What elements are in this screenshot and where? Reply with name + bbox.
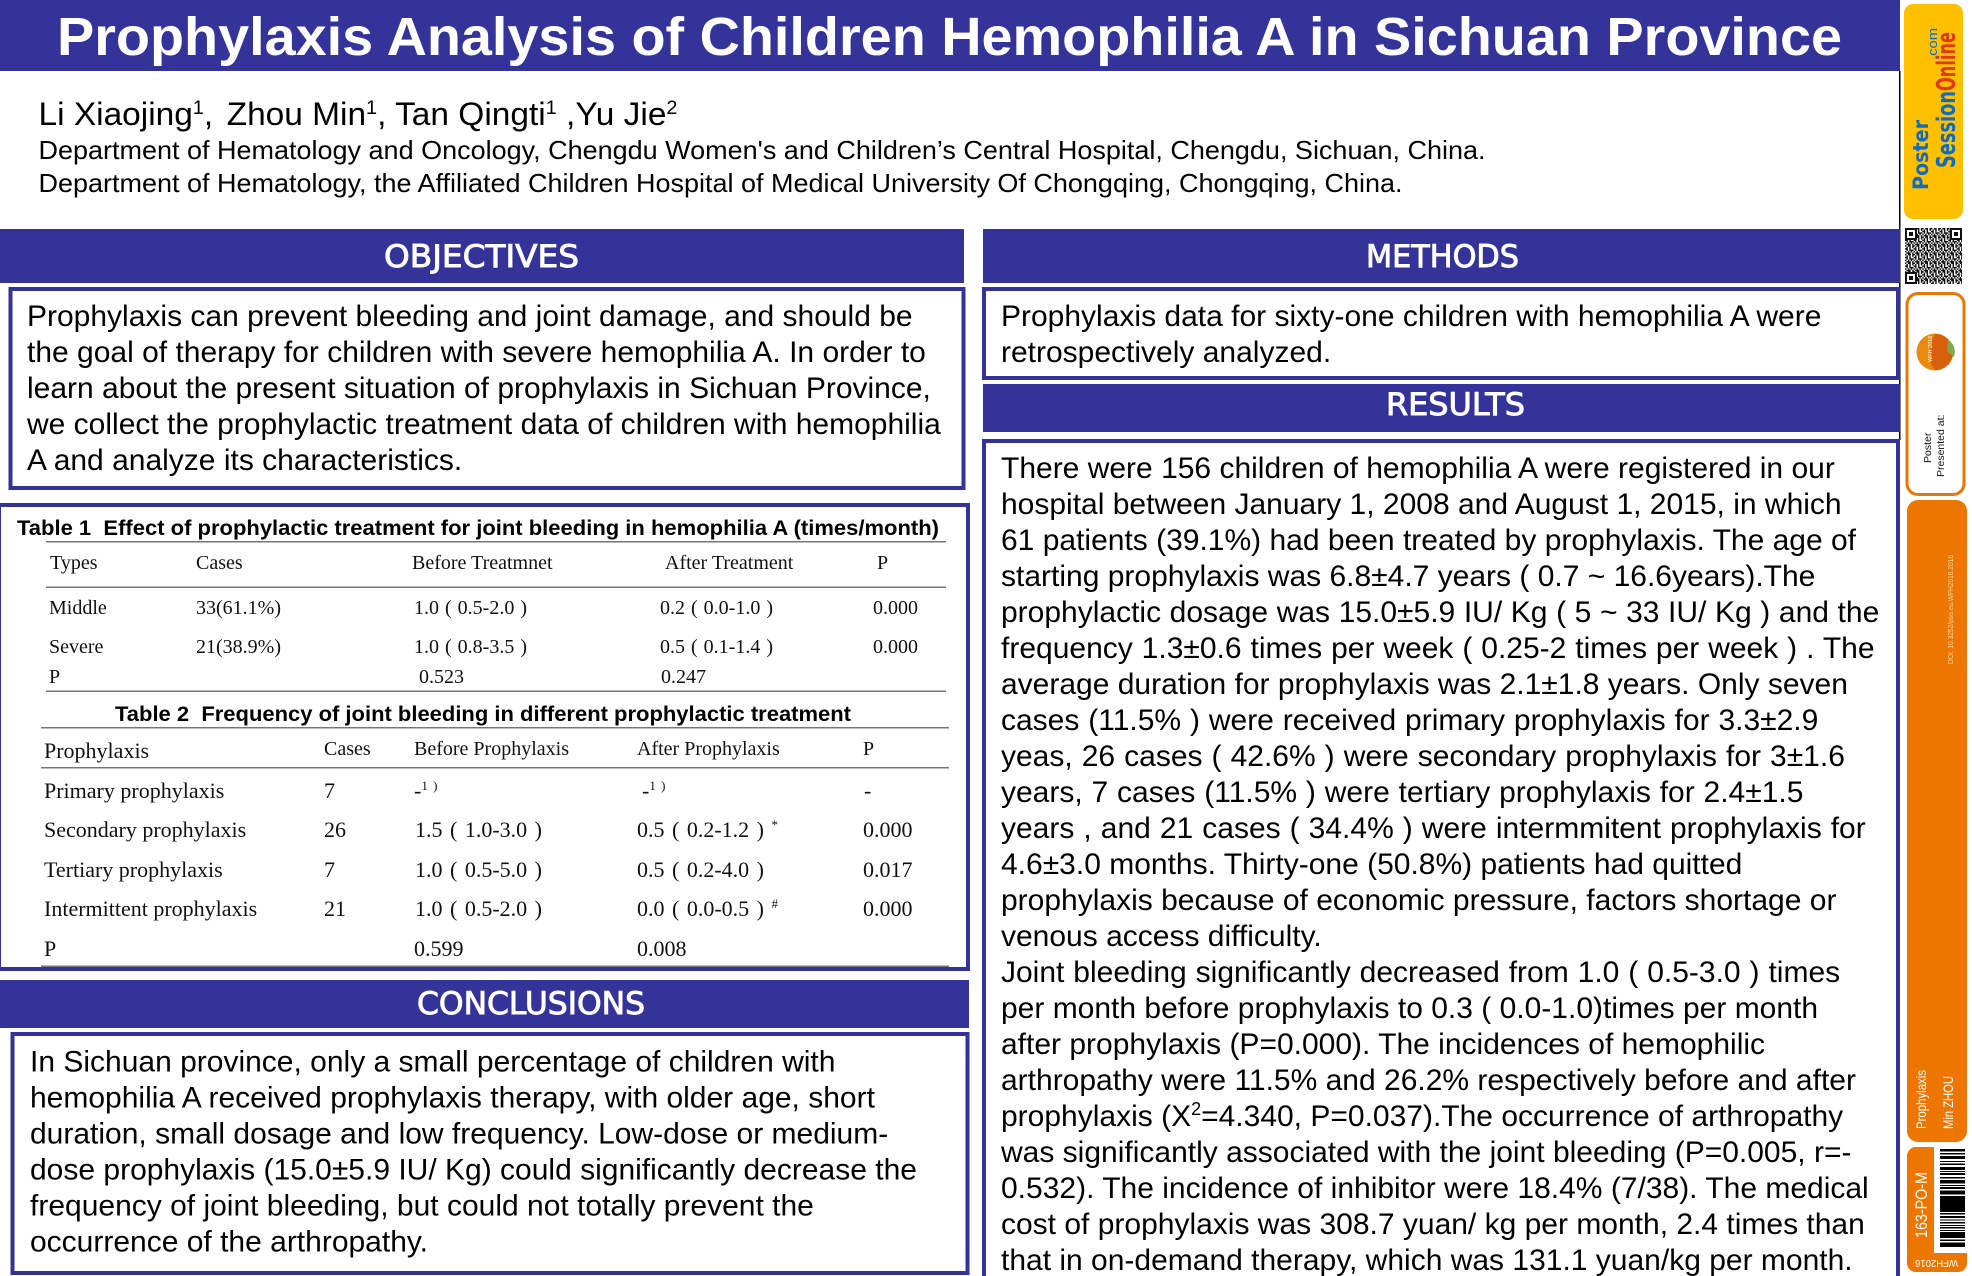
logo: PosterSessionOnline: Session xyxy=(1932,91,1962,168)
objectives text: we collect the prophylactic treatment data of children with hemophilia xyxy=(26,408,941,441)
table 2: P xyxy=(863,738,874,760)
table 2 title: Table 2 Frequency of joint bleeding in different prophylactic treatment xyxy=(115,703,851,726)
sidebar xyxy=(1904,4,1967,1272)
table 1: 1.0 ( 0.5-2.0 ) xyxy=(414,597,527,619)
table 2: 0.5 ( 0.2-1.2 ) xyxy=(637,817,764,842)
table 1: 0.523 xyxy=(419,666,464,688)
results text: years, 7 cases (11.5% ) were tertiary prophylaxis for 2.4±1.5 xyxy=(1001,776,1803,809)
presented at label xyxy=(1922,415,1947,477)
table 2: 1.0 ( 0.5-5.0 ) xyxy=(415,857,542,882)
panel: methods xyxy=(983,229,1900,378)
authors and affiliations xyxy=(38,96,1485,198)
objectives text: Prophylaxis can prevent bleeding and joint damage, and should be xyxy=(27,300,913,333)
table 2: 7 xyxy=(324,778,335,803)
authors: ,Yu Jie xyxy=(557,96,666,132)
logo: PosterSessionOnline: .com xyxy=(1925,28,1940,60)
table 2: Prophylaxis xyxy=(44,738,149,763)
table 1: Cases xyxy=(196,552,243,574)
methods text: Prophylaxis data for sixty-one children with hemophilia A were xyxy=(1001,300,1821,333)
table 2: 0.000 xyxy=(863,896,912,921)
results text: average duration for prophylaxis was 2.1±1.8 years. Only seven xyxy=(1001,668,1848,701)
table 2: 1.5 ( 1.0-3.0 ) xyxy=(415,817,542,842)
QR code xyxy=(1905,228,1962,284)
authors: 1 xyxy=(546,98,557,119)
table 2: Secondary prophylaxis xyxy=(44,817,246,842)
results text: 4.6±3.0 months. Thirty-one (50.8%) patients had quitted xyxy=(1001,848,1742,881)
table 2: After Prophylaxis xyxy=(637,738,780,760)
results text: years , and 21 cases ( 34.4% ) were intermmitent prophylaxis for xyxy=(1001,812,1866,845)
table 2: 1.0 ( 0.5-2.0 ) xyxy=(415,896,542,921)
methods heading: METHODS xyxy=(1366,239,1519,275)
table 2: - xyxy=(642,778,649,803)
results text: cases (11.5% ) were received primary prophylaxis for 3.3±2.9 xyxy=(1001,704,1818,737)
results text: prophylactic dosage was 15.0±5.9 IU/ Kg ( 5 ~ 33 IU/ Kg ) and the xyxy=(1001,596,1879,629)
objectives text: A and analyze its characteristics. xyxy=(27,444,462,477)
table 2: Before Prophylaxis xyxy=(414,738,569,760)
table 2: 1 ) xyxy=(649,778,665,793)
title: Prophylaxis Analysis of Children Hemophilia A in Sichuan Province xyxy=(57,8,1842,67)
icon: WFH 2016 congress logo xyxy=(1916,334,1955,370)
table 2: 0.000 xyxy=(863,817,912,842)
table 1: Severe xyxy=(49,636,104,658)
table 2: 7 xyxy=(324,857,335,882)
panel: poster presented at xyxy=(1907,294,1964,494)
logo: PosterSessionOnline: Poster xyxy=(1909,119,1933,190)
table 1 title: Table 1 Effect of prophylactic treatment for joint bleeding in hemophilia A (times/month) xyxy=(17,517,939,540)
table 2: - xyxy=(864,778,871,803)
table 1 xyxy=(17,517,946,692)
table 1: P xyxy=(877,552,888,574)
conclusions text xyxy=(12,1034,968,1273)
poster title: Prophylaxis xyxy=(1914,1070,1929,1129)
table 2: Tertiary prophylaxis xyxy=(44,857,223,882)
table 2: 0.017 xyxy=(863,857,912,882)
conclusions text: frequency of joint bleeding, but could not totally prevent the xyxy=(30,1190,814,1222)
conclusions text: In Sichuan province, only a small percentage of children with xyxy=(30,1046,835,1078)
table 1: 0.2 ( 0.0-1.0 ) xyxy=(660,597,773,619)
table 1: 0.247 xyxy=(661,666,706,688)
results text: yeas, 26 cases ( 42.6% ) were secondary prophylaxis for 3±1.6 xyxy=(1001,740,1845,773)
table 1: P xyxy=(49,666,60,688)
presented at label: Presented at: xyxy=(1935,415,1947,477)
table 1: 33(61.1%) xyxy=(196,597,281,619)
results text: per month before prophylaxis to 0.3 ( 0.0-1.0)times per month xyxy=(1001,992,1818,1025)
conclusions text: occurrence of the arthropathy. xyxy=(30,1226,428,1258)
objectives text xyxy=(10,289,964,488)
results text: prophylaxis because of economic pressure, factors shortage or xyxy=(1001,884,1836,917)
table 2: 0.5 ( 0.2-4.0 ) xyxy=(637,857,764,882)
logo: PosterSessionOnline xyxy=(1904,4,1963,219)
objectives heading: OBJECTIVES xyxy=(384,239,579,275)
results text: after prophylaxis (P=0.000). The incidences of hemophilic xyxy=(1001,1028,1765,1061)
methods text xyxy=(984,289,1898,378)
table 2: 0.0 ( 0.0-0.5 ) xyxy=(637,896,764,921)
table 2: # xyxy=(771,896,778,911)
results text: cost of prophylaxis was 308.7 yuan/ kg per month, 2.4 times than xyxy=(1001,1208,1865,1241)
table 2: 1 ) xyxy=(421,778,437,793)
objectives text: the goal of therapy for children with severe hemophilia A. In order to xyxy=(27,336,926,369)
objectives heading xyxy=(0,229,964,283)
methods heading xyxy=(983,229,1900,283)
results text: was significantly associated with the joint bleeding (P=0.005, r=- xyxy=(1000,1136,1851,1169)
title banner xyxy=(0,0,1900,71)
affiliation 2: Department of Hematology, the Affiliated Children Hospital of Medical University Of Chongqing, Chongqing, China. xyxy=(38,168,1402,198)
table 2: 21 xyxy=(324,896,346,921)
conclusions text: hemophilia A received prophylaxis therapy, with older age, short xyxy=(30,1082,876,1114)
authors: 1 xyxy=(193,98,204,119)
icon: WFH 2016 congress logo: WFH 2016 xyxy=(1928,336,1934,362)
panel: poster info xyxy=(1907,500,1967,1142)
results text: 61 patients (39.1%) had been treated by prophylaxis. The age of xyxy=(1001,524,1857,557)
affiliation 1: Department of Hematology and Oncology, Chengdu Women's and Children’s Central Hospital, Chengdu, Sichuan, China. xyxy=(38,135,1485,165)
results heading: RESULTS xyxy=(1386,387,1525,423)
presenter: Min ZHOU xyxy=(1941,1076,1956,1129)
results text: arthropathy were 11.5% and 26.2% respectively before and after xyxy=(1001,1064,1856,1097)
table 2 xyxy=(41,703,949,967)
panel: objectives xyxy=(0,229,964,488)
panel: conclusions xyxy=(0,980,969,1273)
table 2: P xyxy=(44,936,56,961)
congress code: WFH2016 xyxy=(1915,1257,1958,1268)
conclusions text: duration, small dosage and low frequency. Low-dose or medium- xyxy=(30,1118,888,1150)
results heading xyxy=(983,384,1900,432)
table 2: Intermittent prophylaxis xyxy=(44,896,257,921)
table 2: Primary prophylaxis xyxy=(44,778,224,803)
barcode xyxy=(1940,1149,1965,1247)
table 1: 21(38.9%) xyxy=(196,636,281,658)
results text: 2 xyxy=(1191,1099,1201,1119)
table 2: 26 xyxy=(324,817,346,842)
results text: =4.340, P=0.037).The occurrence of arthropathy xyxy=(1201,1100,1843,1133)
results text: frequency 1.3±0.6 times per week ( 0.25-2 times per week ) . The xyxy=(1001,632,1875,665)
results text: Joint bleeding significantly decreased from 1.0 ( 0.5-3.0 ) times xyxy=(1001,956,1840,989)
poster number: 163-PO-M xyxy=(1912,1172,1931,1238)
authors: Li Xiaojing xyxy=(38,96,186,132)
conclusions heading xyxy=(0,980,969,1028)
conclusions heading: CONCLUSIONS xyxy=(417,986,645,1022)
table 1: 0.5 ( 0.1-1.4 ) xyxy=(660,636,773,658)
table 2: - xyxy=(414,778,421,803)
DOI: DOI: 10.3252/pso.eu.WFH2016.2016 xyxy=(1946,555,1955,664)
results text: starting prophylaxis was 6.8±4.7 years ( 0.7 ~ 16.6years).The xyxy=(1001,560,1815,593)
table 1: 0.000 xyxy=(873,636,918,658)
results text: 0.532). The incidence of inhibitor were 18.4% (7/38). The medical xyxy=(1001,1172,1869,1205)
presented at label: Poster xyxy=(1922,432,1934,463)
table 2: 0.599 xyxy=(414,936,464,961)
table 1: 1.0 ( 0.8-3.5 ) xyxy=(414,636,527,658)
table 1: Middle xyxy=(49,597,107,619)
objectives text: learn about the present situation of prophylaxis in Sichuan Province, xyxy=(27,372,931,405)
methods text: retrospectively analyzed. xyxy=(1001,336,1331,369)
authors: Zhou Min xyxy=(227,96,366,132)
results text: prophylaxis (X xyxy=(1001,1100,1191,1133)
panel: tables xyxy=(0,505,968,969)
table 1: Types xyxy=(50,552,98,574)
authors: , xyxy=(204,96,222,132)
table 1: 0.000 xyxy=(873,597,918,619)
table 1: After Treatment xyxy=(665,552,794,574)
results text: venous access difficulty. xyxy=(1001,920,1322,953)
table 1: Before Treatmnet xyxy=(412,552,553,574)
results text: There were 156 children of hemophilia A were registered in our xyxy=(1001,452,1835,485)
table 2: 0.008 xyxy=(637,936,686,961)
panel: poster code xyxy=(1907,1147,1967,1272)
conclusions text: dose prophylaxis (15.0±5.9 IU/ Kg) could significantly decrease the xyxy=(30,1154,917,1186)
table 2: * xyxy=(771,817,778,832)
authors: 1 xyxy=(366,98,377,119)
table 2: Cases xyxy=(324,738,371,760)
authors: 2 xyxy=(666,98,678,119)
results text: hospital between January 1, 2008 and August 1, 2015, in which xyxy=(1001,488,1842,521)
panel: results xyxy=(983,384,1900,1276)
results text xyxy=(984,441,1898,1276)
authors: , Tan Qingti xyxy=(377,96,546,132)
